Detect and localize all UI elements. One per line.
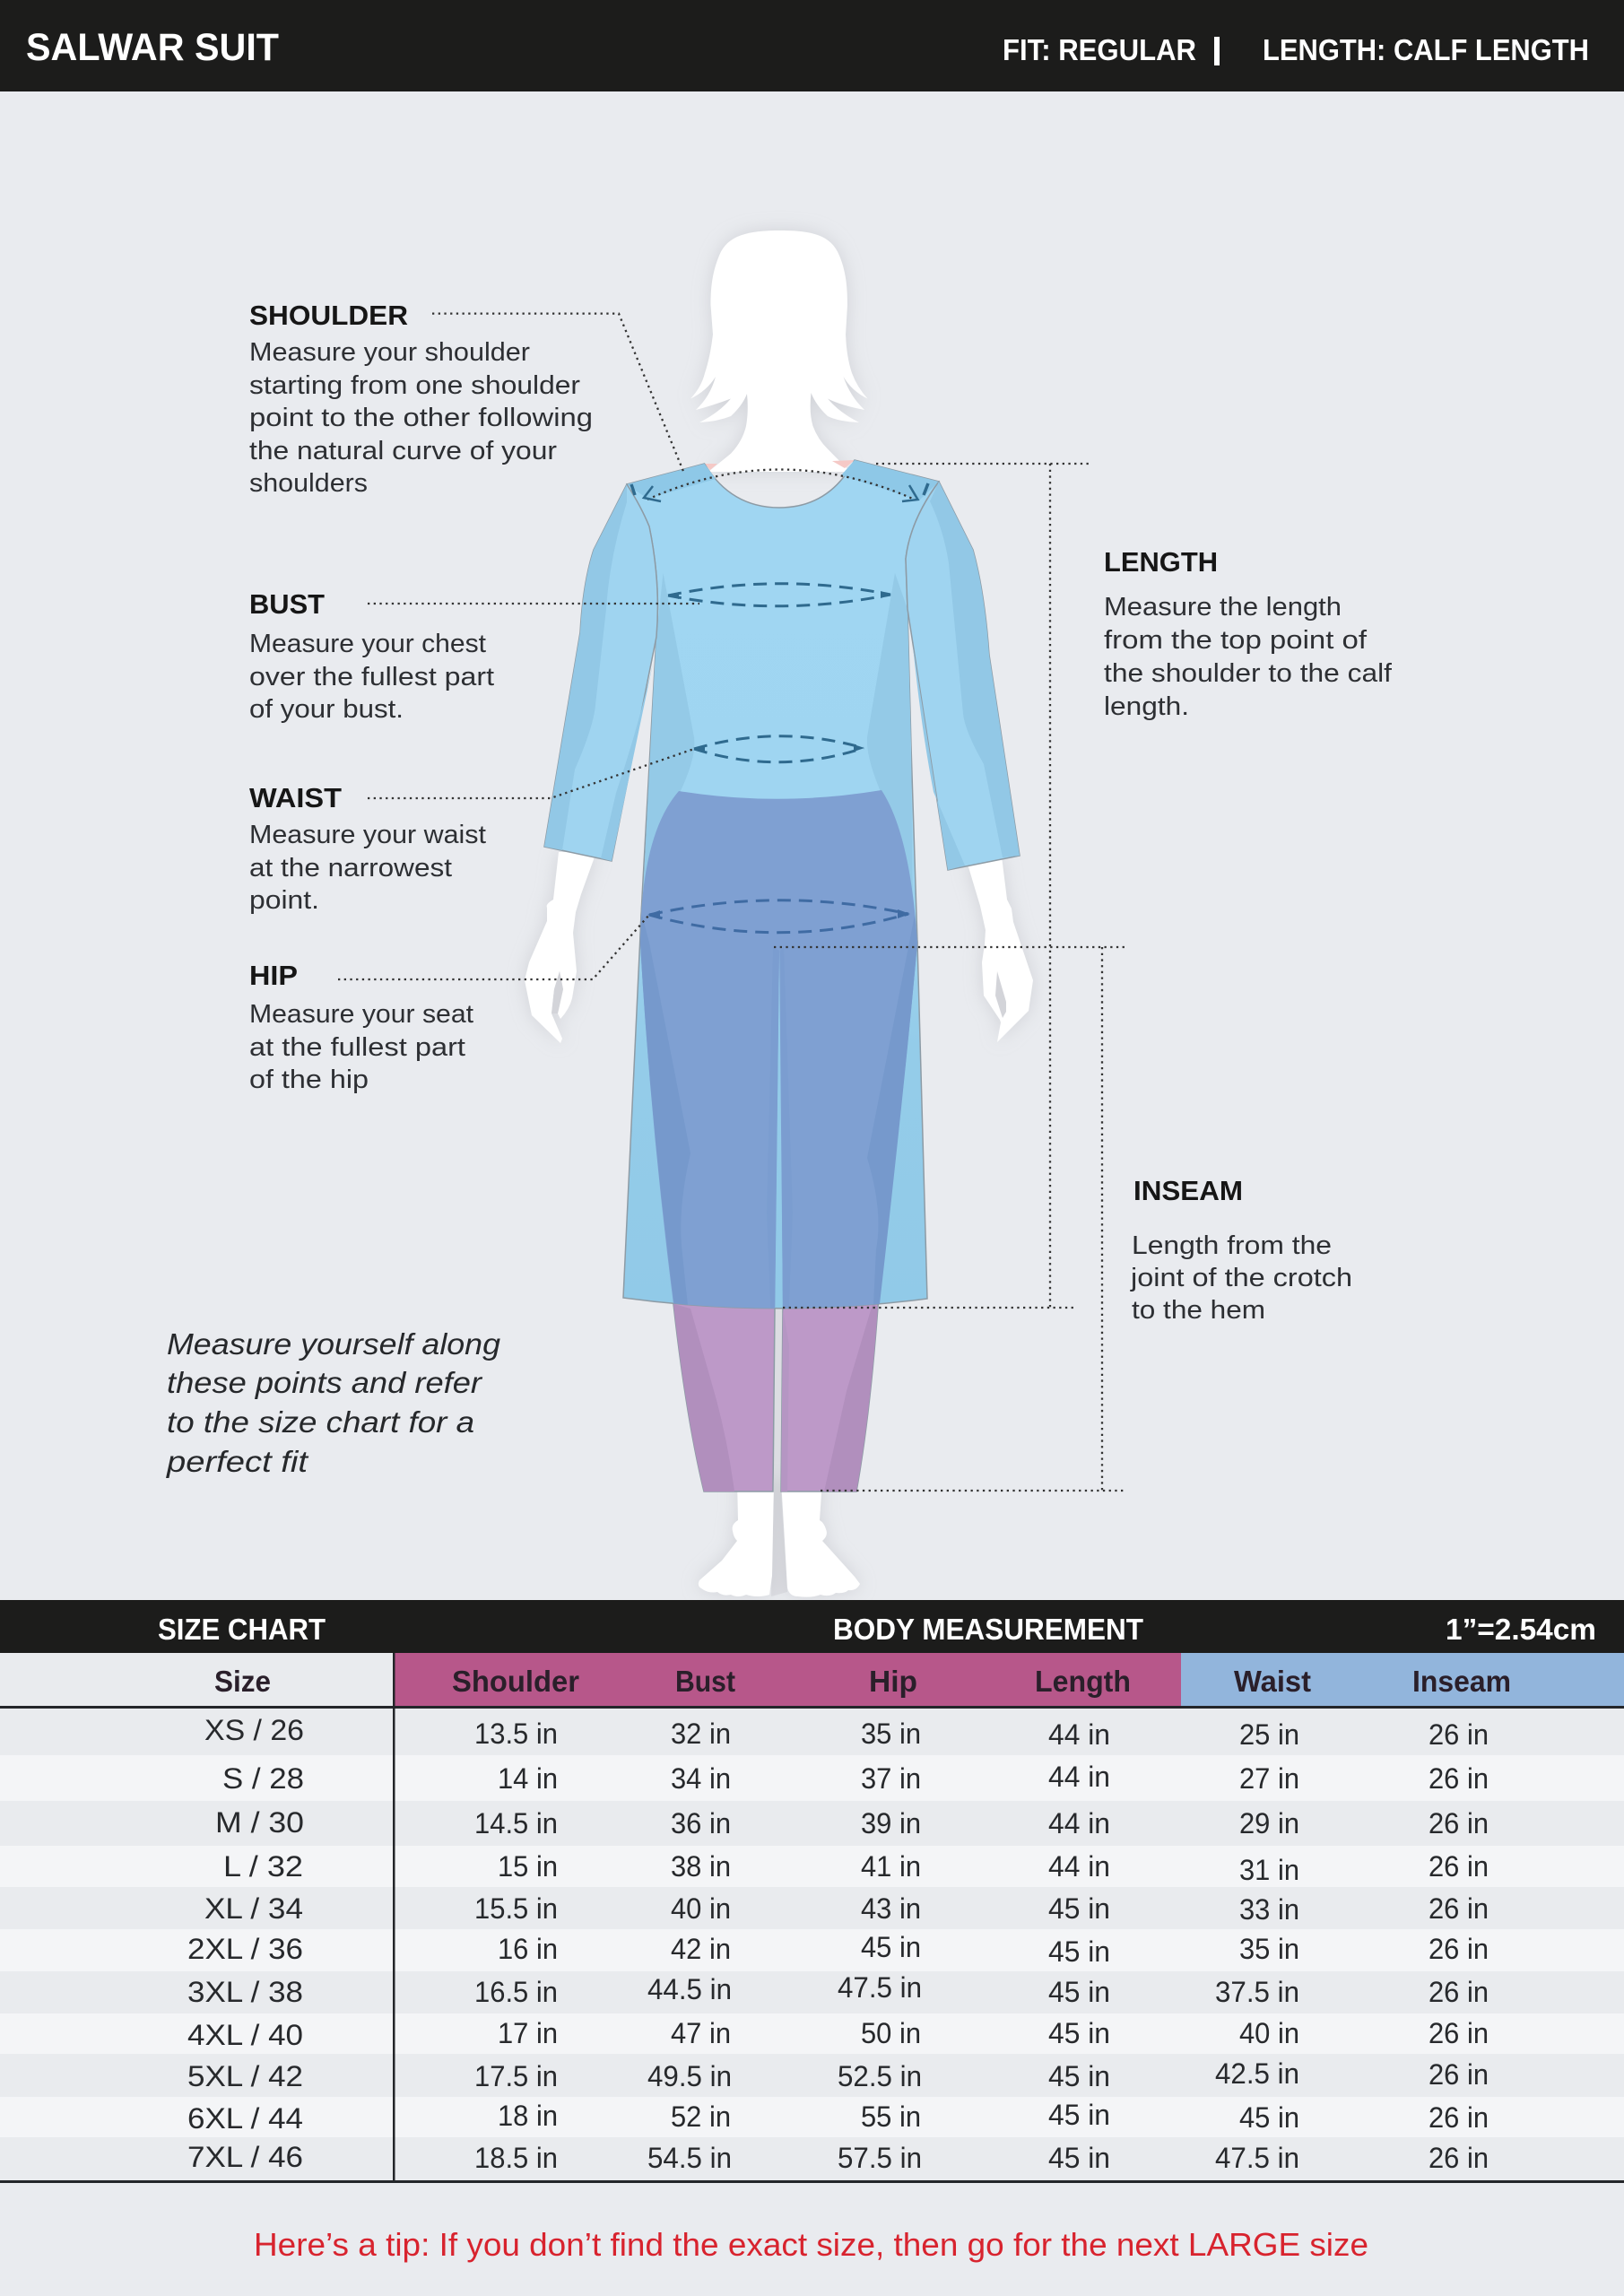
text block: shoulder bbox=[249, 300, 593, 498]
row: XL / 34: 40 in bbox=[671, 1892, 731, 1925]
row: 2XL / 36: 2XL / 36 bbox=[187, 1933, 303, 1965]
hip measure marker bbox=[647, 900, 910, 933]
row: XS / 26: 32 in bbox=[671, 1718, 731, 1750]
row: 6XL / 44: 26 in bbox=[1429, 2101, 1489, 2134]
row: XL / 34: 15.5 in bbox=[474, 1892, 558, 1925]
text block: shoulder: the natural curve of your bbox=[249, 437, 557, 465]
row: 7XL / 46: 45 in bbox=[1048, 2142, 1110, 2174]
row: 6XL / 44: 45 in bbox=[1048, 2099, 1110, 2131]
row: XS / 26: 44 in bbox=[1048, 1718, 1110, 1751]
left sleeve bbox=[544, 484, 657, 861]
row: 5XL / 42: 17.5 in bbox=[474, 2060, 558, 2092]
row: XS / 26: XS / 26 bbox=[204, 1714, 304, 1746]
row: S / 28: 44 in bbox=[1048, 1761, 1110, 1793]
text block: hip: at the fullest part bbox=[249, 1033, 465, 1062]
text block: shoulder: shoulders bbox=[249, 469, 368, 498]
text block: bust: Measure your chest bbox=[249, 630, 486, 658]
row: XL / 34: 33 in bbox=[1239, 1893, 1299, 1926]
row: 4XL / 40 bbox=[187, 2017, 1489, 2051]
shoulder yoke bbox=[627, 464, 716, 499]
column header row bbox=[0, 1653, 1624, 1707]
row: L / 32: 15 in bbox=[498, 1850, 558, 1883]
title: SALWAR SUIT bbox=[26, 26, 279, 69]
row: 3XL / 38: 26 in bbox=[1429, 1976, 1489, 2008]
row: XS / 26 bbox=[204, 1714, 1489, 1751]
row: 3XL / 38: 47.5 in bbox=[838, 1971, 922, 2004]
figure: body with salwar suit bbox=[525, 230, 1033, 1597]
text block: bust: BUST bbox=[249, 588, 325, 620]
row: XS / 26: 13.5 in bbox=[474, 1718, 558, 1750]
row: L / 32: 41 in bbox=[861, 1850, 921, 1883]
row: 3XL / 38: 45 in bbox=[1048, 1976, 1110, 2008]
row: 6XL / 44: 45 in bbox=[1239, 2101, 1299, 2134]
italic note: these points and refer bbox=[167, 1366, 483, 1399]
row: XS / 26: 26 in bbox=[1429, 1718, 1489, 1751]
text block: waist: Measure your waist bbox=[249, 821, 486, 849]
table rules bbox=[0, 1653, 1624, 2183]
row: 4XL / 40: 4XL / 40 bbox=[187, 2019, 303, 2051]
row: 7XL / 46 bbox=[187, 2141, 1489, 2174]
text block: inseam: Length from the bbox=[1132, 1231, 1332, 1260]
row: L / 32 bbox=[223, 1850, 1489, 1886]
row: 2XL / 36: 45 in bbox=[861, 1931, 921, 1963]
row: 3XL / 38 bbox=[187, 1971, 1489, 2008]
table title bar: 1”=2.54cm bbox=[1446, 1613, 1596, 1646]
row: XS / 26: 25 in bbox=[1239, 1718, 1299, 1751]
row: 2XL / 36 bbox=[187, 1931, 1489, 1968]
italic note: to the size chart for a bbox=[167, 1405, 474, 1439]
row: M / 30 bbox=[215, 1806, 1489, 1839]
text block: inseam: INSEAM bbox=[1133, 1175, 1243, 1206]
row: S / 28 bbox=[222, 1761, 1489, 1795]
kurta bbox=[544, 460, 1020, 1309]
row: XL / 34 bbox=[204, 1892, 1489, 1926]
row: 5XL / 42: 5XL / 42 bbox=[187, 2060, 303, 2092]
italic note bbox=[166, 1327, 501, 1478]
row: 7XL / 46: 57.5 in bbox=[838, 2142, 922, 2174]
row: 5XL / 42: 52.5 in bbox=[838, 2060, 922, 2092]
column header row: Inseam bbox=[1412, 1665, 1511, 1698]
text block: hip: Measure your seat bbox=[249, 1000, 473, 1029]
row: S / 28: 37 in bbox=[861, 1762, 921, 1795]
row: 4XL / 40: 26 in bbox=[1429, 2017, 1489, 2049]
length dimension line bbox=[783, 464, 1091, 1308]
row: S / 28: 14 in bbox=[498, 1762, 558, 1795]
row: XS / 26: 35 in bbox=[861, 1718, 921, 1750]
text block: length: from the top point of bbox=[1104, 626, 1368, 655]
table title bar: SIZE CHART bbox=[158, 1613, 326, 1646]
text block: hip bbox=[249, 960, 473, 1094]
table title bar bbox=[0, 1600, 1624, 1653]
row: S / 28: 34 in bbox=[671, 1762, 731, 1795]
row: 2XL / 36: 45 in bbox=[1048, 1935, 1110, 1968]
row: 3XL / 38: 16.5 in bbox=[474, 1976, 558, 2008]
left arm and hand bbox=[525, 852, 596, 1043]
column header row: Bust bbox=[675, 1665, 735, 1698]
row: 2XL / 36: 35 in bbox=[1239, 1933, 1299, 1965]
row: 4XL / 40: 40 in bbox=[1239, 2017, 1299, 2049]
row: XL / 34: 45 in bbox=[1048, 1892, 1110, 1925]
head, hair and neck bbox=[690, 230, 868, 472]
neck skin bbox=[705, 460, 855, 470]
separator bbox=[1214, 37, 1220, 65]
row: 7XL / 46: 47.5 in bbox=[1215, 2142, 1299, 2174]
row: 4XL / 40: 47 in bbox=[671, 2017, 731, 2049]
shaded gap between the legs bbox=[771, 1309, 787, 1596]
italic note: Measure yourself along bbox=[167, 1327, 501, 1361]
column header row: Length bbox=[1035, 1665, 1131, 1698]
length label: LENGTH: CALF LENGTH bbox=[1263, 33, 1589, 66]
text block: waist: at the narrowest bbox=[249, 854, 452, 883]
right arm and hand bbox=[967, 857, 1033, 1042]
row: 4XL / 40: 45 in bbox=[1048, 2017, 1110, 2049]
row: 6XL / 44: 52 in bbox=[671, 2100, 731, 2133]
text block: inseam: joint of the crotch bbox=[1130, 1264, 1352, 1292]
text block: shoulder: starting from one shoulder bbox=[249, 371, 580, 400]
italic note: perfect fit bbox=[166, 1445, 309, 1478]
row: 6XL / 44: 6XL / 44 bbox=[187, 2102, 303, 2135]
row: L / 32: 44 in bbox=[1048, 1850, 1110, 1883]
tip text: Here’s a tip: If you don’t find the exact size, then go for the next LARGE size bbox=[254, 2226, 1368, 2263]
row: L / 32: 38 in bbox=[671, 1850, 731, 1883]
text block: length bbox=[1104, 546, 1393, 721]
header bar bbox=[0, 0, 1624, 91]
row: M / 30: 39 in bbox=[861, 1807, 921, 1839]
shoulder measure marker bbox=[631, 470, 928, 501]
row: L / 32: 31 in bbox=[1239, 1854, 1299, 1886]
text block: waist: WAIST bbox=[249, 782, 342, 813]
row: XL / 34: 43 in bbox=[861, 1892, 921, 1925]
row: 7XL / 46: 26 in bbox=[1429, 2142, 1489, 2174]
row: L / 32: 26 in bbox=[1429, 1850, 1489, 1883]
right foot bbox=[781, 1480, 860, 1597]
kurta side shades bbox=[642, 573, 694, 915]
row: 6XL / 44: 55 in bbox=[861, 2100, 921, 2133]
salwar lower legs bbox=[640, 790, 917, 1492]
row: 7XL / 46: 7XL / 46 bbox=[187, 2141, 303, 2173]
text block: shoulder: Measure your shoulder bbox=[249, 338, 530, 367]
text block: bust bbox=[249, 588, 494, 724]
text block: waist: point. bbox=[249, 886, 319, 915]
row: 3XL / 38: 44.5 in bbox=[647, 1973, 732, 2005]
row: 5XL / 42: 49.5 in bbox=[647, 2060, 732, 2092]
thumb gaps bbox=[551, 971, 1006, 1018]
text block: hip: HIP bbox=[249, 960, 298, 991]
row: 3XL / 38: 37.5 in bbox=[1215, 1976, 1299, 2008]
kurta body bbox=[623, 460, 939, 1309]
right sleeve bbox=[906, 482, 1020, 870]
row: M / 30: 44 in bbox=[1048, 1807, 1110, 1839]
row: S / 28: S / 28 bbox=[222, 1762, 304, 1795]
row: 5XL / 42: 26 in bbox=[1429, 2058, 1489, 2091]
leader lines bbox=[338, 314, 699, 979]
row: M / 30: 26 in bbox=[1429, 1807, 1489, 1839]
row: 2XL / 36: 26 in bbox=[1429, 1933, 1489, 1965]
row: M / 30: M / 30 bbox=[215, 1806, 304, 1839]
row: 3XL / 38: 3XL / 38 bbox=[187, 1976, 303, 2008]
text block: hip: of the hip bbox=[249, 1065, 369, 1094]
row: 2XL / 36: 42 in bbox=[671, 1933, 731, 1965]
text block: length: the shoulder to the calf bbox=[1104, 659, 1393, 688]
body silhouette bbox=[525, 230, 1033, 1597]
row: 2XL / 36: 16 in bbox=[498, 1933, 558, 1965]
column header row: Waist bbox=[1234, 1665, 1311, 1698]
row: S / 28: 26 in bbox=[1429, 1762, 1489, 1795]
row: 6XL / 44 bbox=[187, 2099, 1489, 2135]
row: 6XL / 44: 18 in bbox=[498, 2100, 558, 2132]
row: S / 28: 27 in bbox=[1239, 1762, 1299, 1795]
row: XL / 34: 26 in bbox=[1429, 1892, 1489, 1925]
text block: shoulder: SHOULDER bbox=[249, 300, 408, 331]
salwar over kurta bbox=[640, 790, 917, 1327]
row: L / 32: L / 32 bbox=[223, 1850, 303, 1883]
row: M / 30: 29 in bbox=[1239, 1807, 1299, 1839]
table title bar: BODY MEASUREMENT bbox=[833, 1613, 1143, 1646]
row: M / 30: 14.5 in bbox=[474, 1807, 558, 1839]
fit label: FIT: REGULAR bbox=[1003, 33, 1196, 66]
column header row: Hip bbox=[869, 1665, 917, 1698]
column header row: Size bbox=[214, 1665, 271, 1698]
row: 4XL / 40: 17 in bbox=[498, 2017, 558, 2049]
text block: length: Measure the length bbox=[1104, 593, 1342, 622]
text block: length: length. bbox=[1104, 692, 1189, 721]
text block: length: LENGTH bbox=[1104, 546, 1218, 578]
row: XL / 34: XL / 34 bbox=[204, 1892, 303, 1925]
row: M / 30: 36 in bbox=[671, 1807, 731, 1839]
text block: inseam: to the hem bbox=[1132, 1296, 1265, 1325]
row: 5XL / 42: 42.5 in bbox=[1215, 2057, 1299, 2090]
row: 7XL / 46: 54.5 in bbox=[647, 2142, 732, 2174]
left foot bbox=[699, 1480, 774, 1596]
row bands bbox=[0, 1708, 1624, 2180]
text block: bust: over the fullest part bbox=[249, 663, 494, 691]
row: 7XL / 46: 18.5 in bbox=[474, 2142, 558, 2174]
text block: inseam bbox=[1130, 1175, 1352, 1325]
text block: bust: of your bust. bbox=[249, 695, 404, 724]
row: 5XL / 42: 45 in bbox=[1048, 2060, 1110, 2092]
waist measure marker bbox=[694, 736, 864, 762]
bust measure marker bbox=[668, 584, 891, 606]
row: 4XL / 40: 50 in bbox=[861, 2017, 921, 2049]
column header row: Shoulder bbox=[452, 1665, 579, 1698]
inseam dimension line bbox=[774, 947, 1126, 1492]
size chart table bbox=[0, 1600, 1624, 2183]
text block: waist bbox=[249, 782, 486, 915]
text block: shoulder: point to the other following bbox=[249, 404, 593, 432]
row: 5XL / 42 bbox=[187, 2057, 1489, 2092]
